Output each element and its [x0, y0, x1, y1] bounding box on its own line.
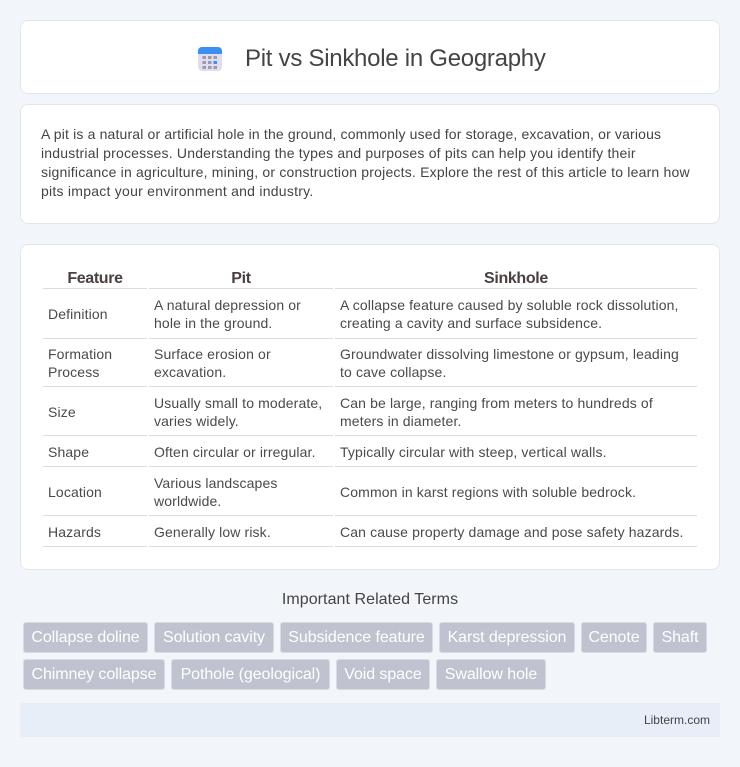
comparison table: Size: [48, 404, 76, 420]
related term tags: Subsidence feature: [288, 629, 425, 646]
related term tags: Pothole (geological): [181, 666, 320, 683]
comparison table: hole in the ground.: [154, 315, 272, 331]
comparison table: creating a cavity and surface subsidence.: [340, 315, 602, 331]
comparison table: varies widely.: [154, 413, 239, 429]
intro text: industrial processes. Understanding the types and purposes of pits can help you identify their: [41, 145, 636, 161]
icon: calendar: [198, 47, 222, 71]
related term tags: Collapse doline: [31, 629, 140, 646]
table card: [20, 244, 720, 570]
title: Pit vs Sinkhole in Geography: [245, 45, 546, 72]
related term tags: [23, 622, 707, 690]
comparison table: Pit: [231, 270, 251, 287]
comparison table: Common in karst regions with soluble bedrock.: [340, 484, 636, 500]
comparison table: Location: [48, 484, 102, 500]
comparison table: meters in diameter.: [340, 413, 462, 429]
comparison table: Feature: [67, 270, 123, 287]
related terms heading: Important Related Terms: [282, 591, 458, 608]
comparison table: A collapse feature caused by soluble rock dissolution,: [340, 297, 679, 313]
related term tags: Cenote: [588, 629, 640, 646]
comparison table: [43, 270, 697, 547]
comparison table: Generally low risk.: [154, 524, 271, 540]
comparison table: Can be large, ranging from meters to hundreds of: [340, 395, 653, 411]
related term tags: Swallow hole: [445, 666, 537, 683]
related term tags: Shaft: [662, 629, 698, 646]
related term tags: Chimney collapse: [31, 666, 156, 683]
intro text: [41, 126, 690, 199]
related term tags: Karst depression: [448, 629, 566, 646]
footer bar: [20, 703, 720, 737]
comparison table: excavation.: [154, 364, 226, 380]
comparison table: Formation: [48, 346, 112, 362]
related term tags: Void space: [344, 666, 422, 683]
comparison table: Definition: [48, 306, 108, 322]
comparison table: Various landscapes: [154, 475, 278, 491]
comparison table: Surface erosion or: [154, 346, 271, 362]
comparison table: to cave collapse.: [340, 364, 446, 380]
comparison table: Groundwater dissolving limestone or gypsum, leading: [340, 346, 679, 362]
footer credit: Libterm.com: [644, 713, 710, 727]
comparison table: Often circular or irregular.: [154, 444, 316, 460]
intro text: A pit is a natural or artificial hole in the ground, commonly used for storage, excavation, or various: [41, 126, 661, 142]
comparison table: A natural depression or: [154, 297, 301, 313]
related term tags: Solution cavity: [163, 629, 265, 646]
header card: [20, 20, 720, 94]
intro text: pits impact your environment and industry.: [41, 183, 313, 199]
comparison table: worldwide.: [154, 493, 221, 509]
comparison table: Typically circular with steep, vertical walls.: [340, 444, 607, 460]
comparison table: Usually small to moderate,: [154, 395, 322, 411]
intro card: [20, 104, 720, 224]
comparison table: Can cause property damage and pose safety hazards.: [340, 524, 683, 540]
comparison table: Sinkhole: [484, 270, 548, 287]
intro text: significance in agriculture, mining, or construction projects. Explore the rest of this article to learn how: [41, 164, 690, 180]
comparison table: Hazards: [48, 524, 101, 540]
comparison table: Process: [48, 364, 99, 380]
comparison table: Shape: [48, 444, 89, 460]
